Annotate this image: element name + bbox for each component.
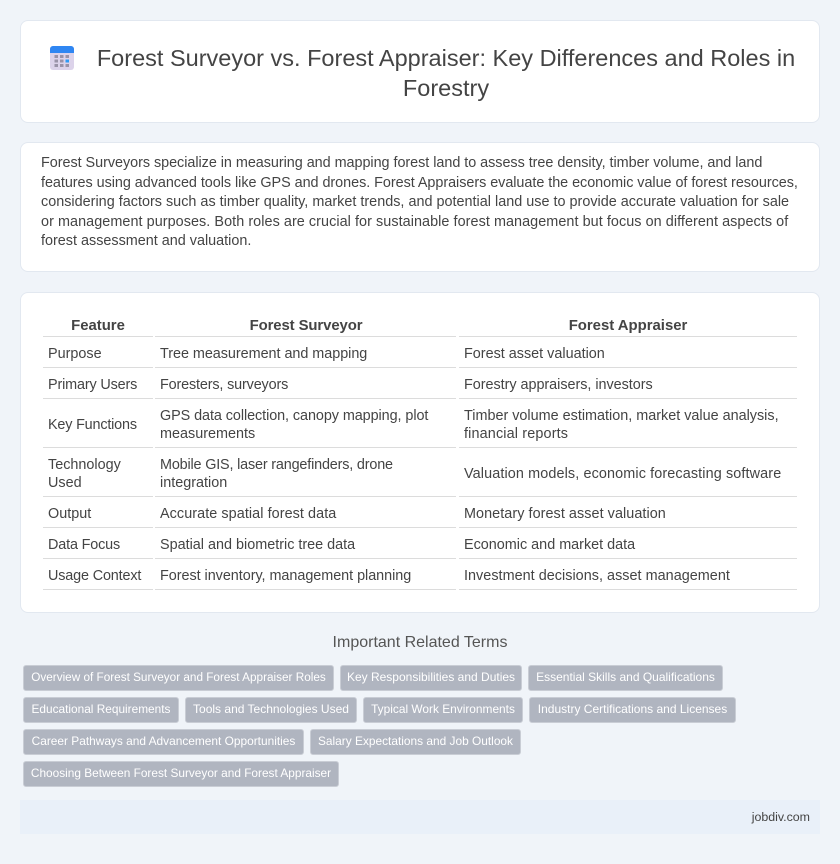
intro paragraph: forest assessment and valuation. (41, 233, 251, 249)
row: usage context (48, 568, 730, 584)
row: output: Output (48, 506, 91, 522)
row: data focus: Data Focus (48, 537, 120, 553)
row: primary users (48, 377, 653, 393)
tag (528, 665, 723, 691)
row: technology used: Mobile GIS, laser rangefinders, drone (160, 457, 393, 473)
tag (363, 697, 523, 723)
row: technology used: Technology (48, 457, 121, 473)
row: output (48, 506, 666, 522)
related term tags (23, 665, 736, 787)
tag (23, 729, 304, 755)
row: technology used (48, 457, 781, 491)
row: output: Monetary forest asset valuation (464, 506, 666, 522)
tag: Essential Skills and Qualifications (536, 670, 715, 684)
row: key functions: financial reports (464, 426, 568, 442)
row: purpose: Forest asset valuation (464, 346, 605, 362)
tag (23, 761, 339, 787)
intro paragraph: features using advanced tools like GPS and drones. Forest Appraisers evaluate the economic value of forest resources, (41, 175, 798, 191)
comparison table (43, 318, 797, 590)
row: data focus: Economic and market data (464, 537, 635, 553)
row: primary users: Primary Users (48, 377, 137, 393)
panel: introduction text (20, 142, 820, 272)
intro paragraph (41, 155, 798, 249)
row: usage context: Investment decisions, asset management (464, 568, 730, 584)
row: purpose: Purpose (48, 346, 102, 362)
intro paragraph: Forest Surveyors specialize in measuring and mapping forest land to assess tree density, timber volume, and land (41, 155, 762, 171)
table header (71, 318, 688, 334)
row: primary users: Foresters, surveyors (160, 377, 288, 393)
row: technology used: integration (160, 475, 227, 491)
tag: Key Responsibilities and Duties (347, 670, 515, 684)
footer site name: jobdiv.com (752, 810, 810, 824)
intro paragraph: or management purposes. Both roles are crucial for sustainable forest management but focus on different aspects of (41, 214, 788, 230)
tag (340, 665, 522, 691)
row: output: Accurate spatial forest data (160, 506, 336, 522)
intro paragraph: considering factors such as timber quality, market trends, and potential land use to provide accurate valuation for sale (41, 194, 789, 210)
row: usage context: Usage Context (48, 568, 141, 584)
row: primary users: Forestry appraisers, investors (464, 377, 653, 393)
row: purpose (48, 346, 605, 362)
row: data focus (48, 537, 636, 553)
heading: related terms: Important Related Terms (333, 634, 507, 651)
tag: Industry Certifications and Licenses (538, 702, 727, 716)
row: key functions: Key Functions (48, 417, 137, 433)
tag: Career Pathways and Advancement Opportunities (32, 734, 295, 748)
row: technology used: Used (48, 475, 82, 491)
row: technology used: Valuation models, economic forecasting software (464, 466, 781, 482)
table header: Feature (71, 318, 125, 334)
row: purpose: Tree measurement and mapping (160, 346, 367, 362)
tag: Typical Work Environments (371, 702, 515, 716)
icon: calendar (50, 46, 74, 70)
panel: comparison table (20, 292, 820, 613)
tag (310, 729, 521, 755)
row: key functions: GPS data collection, canopy mapping, plot (160, 408, 428, 424)
row: key functions: measurements (160, 426, 255, 442)
row: key functions: Timber volume estimation, market value analysis, (464, 408, 779, 424)
tag: Choosing Between Forest Surveyor and Forest Appraiser (31, 766, 331, 780)
tag (23, 697, 179, 723)
table header: Forest Appraiser (569, 318, 687, 334)
table header: Forest Surveyor (250, 318, 362, 334)
panel: title card (20, 20, 820, 123)
tag: Tools and Technologies Used (193, 702, 349, 716)
title: Forest Surveyor vs. Forest Appraiser: Key Differences and Roles in Forestry (97, 45, 795, 101)
tag (23, 665, 334, 691)
footer bar (20, 800, 820, 834)
tag: Salary Expectations and Job Outlook (318, 734, 513, 748)
tag (529, 697, 736, 723)
tag: Educational Requirements (32, 702, 170, 716)
tag: Overview of Forest Surveyor and Forest Appraiser Roles (31, 671, 326, 684)
row: usage context: Forest inventory, management planning (160, 568, 411, 584)
row: key functions (48, 408, 779, 442)
tag (185, 697, 357, 723)
row: data focus: Spatial and biometric tree data (160, 537, 355, 553)
